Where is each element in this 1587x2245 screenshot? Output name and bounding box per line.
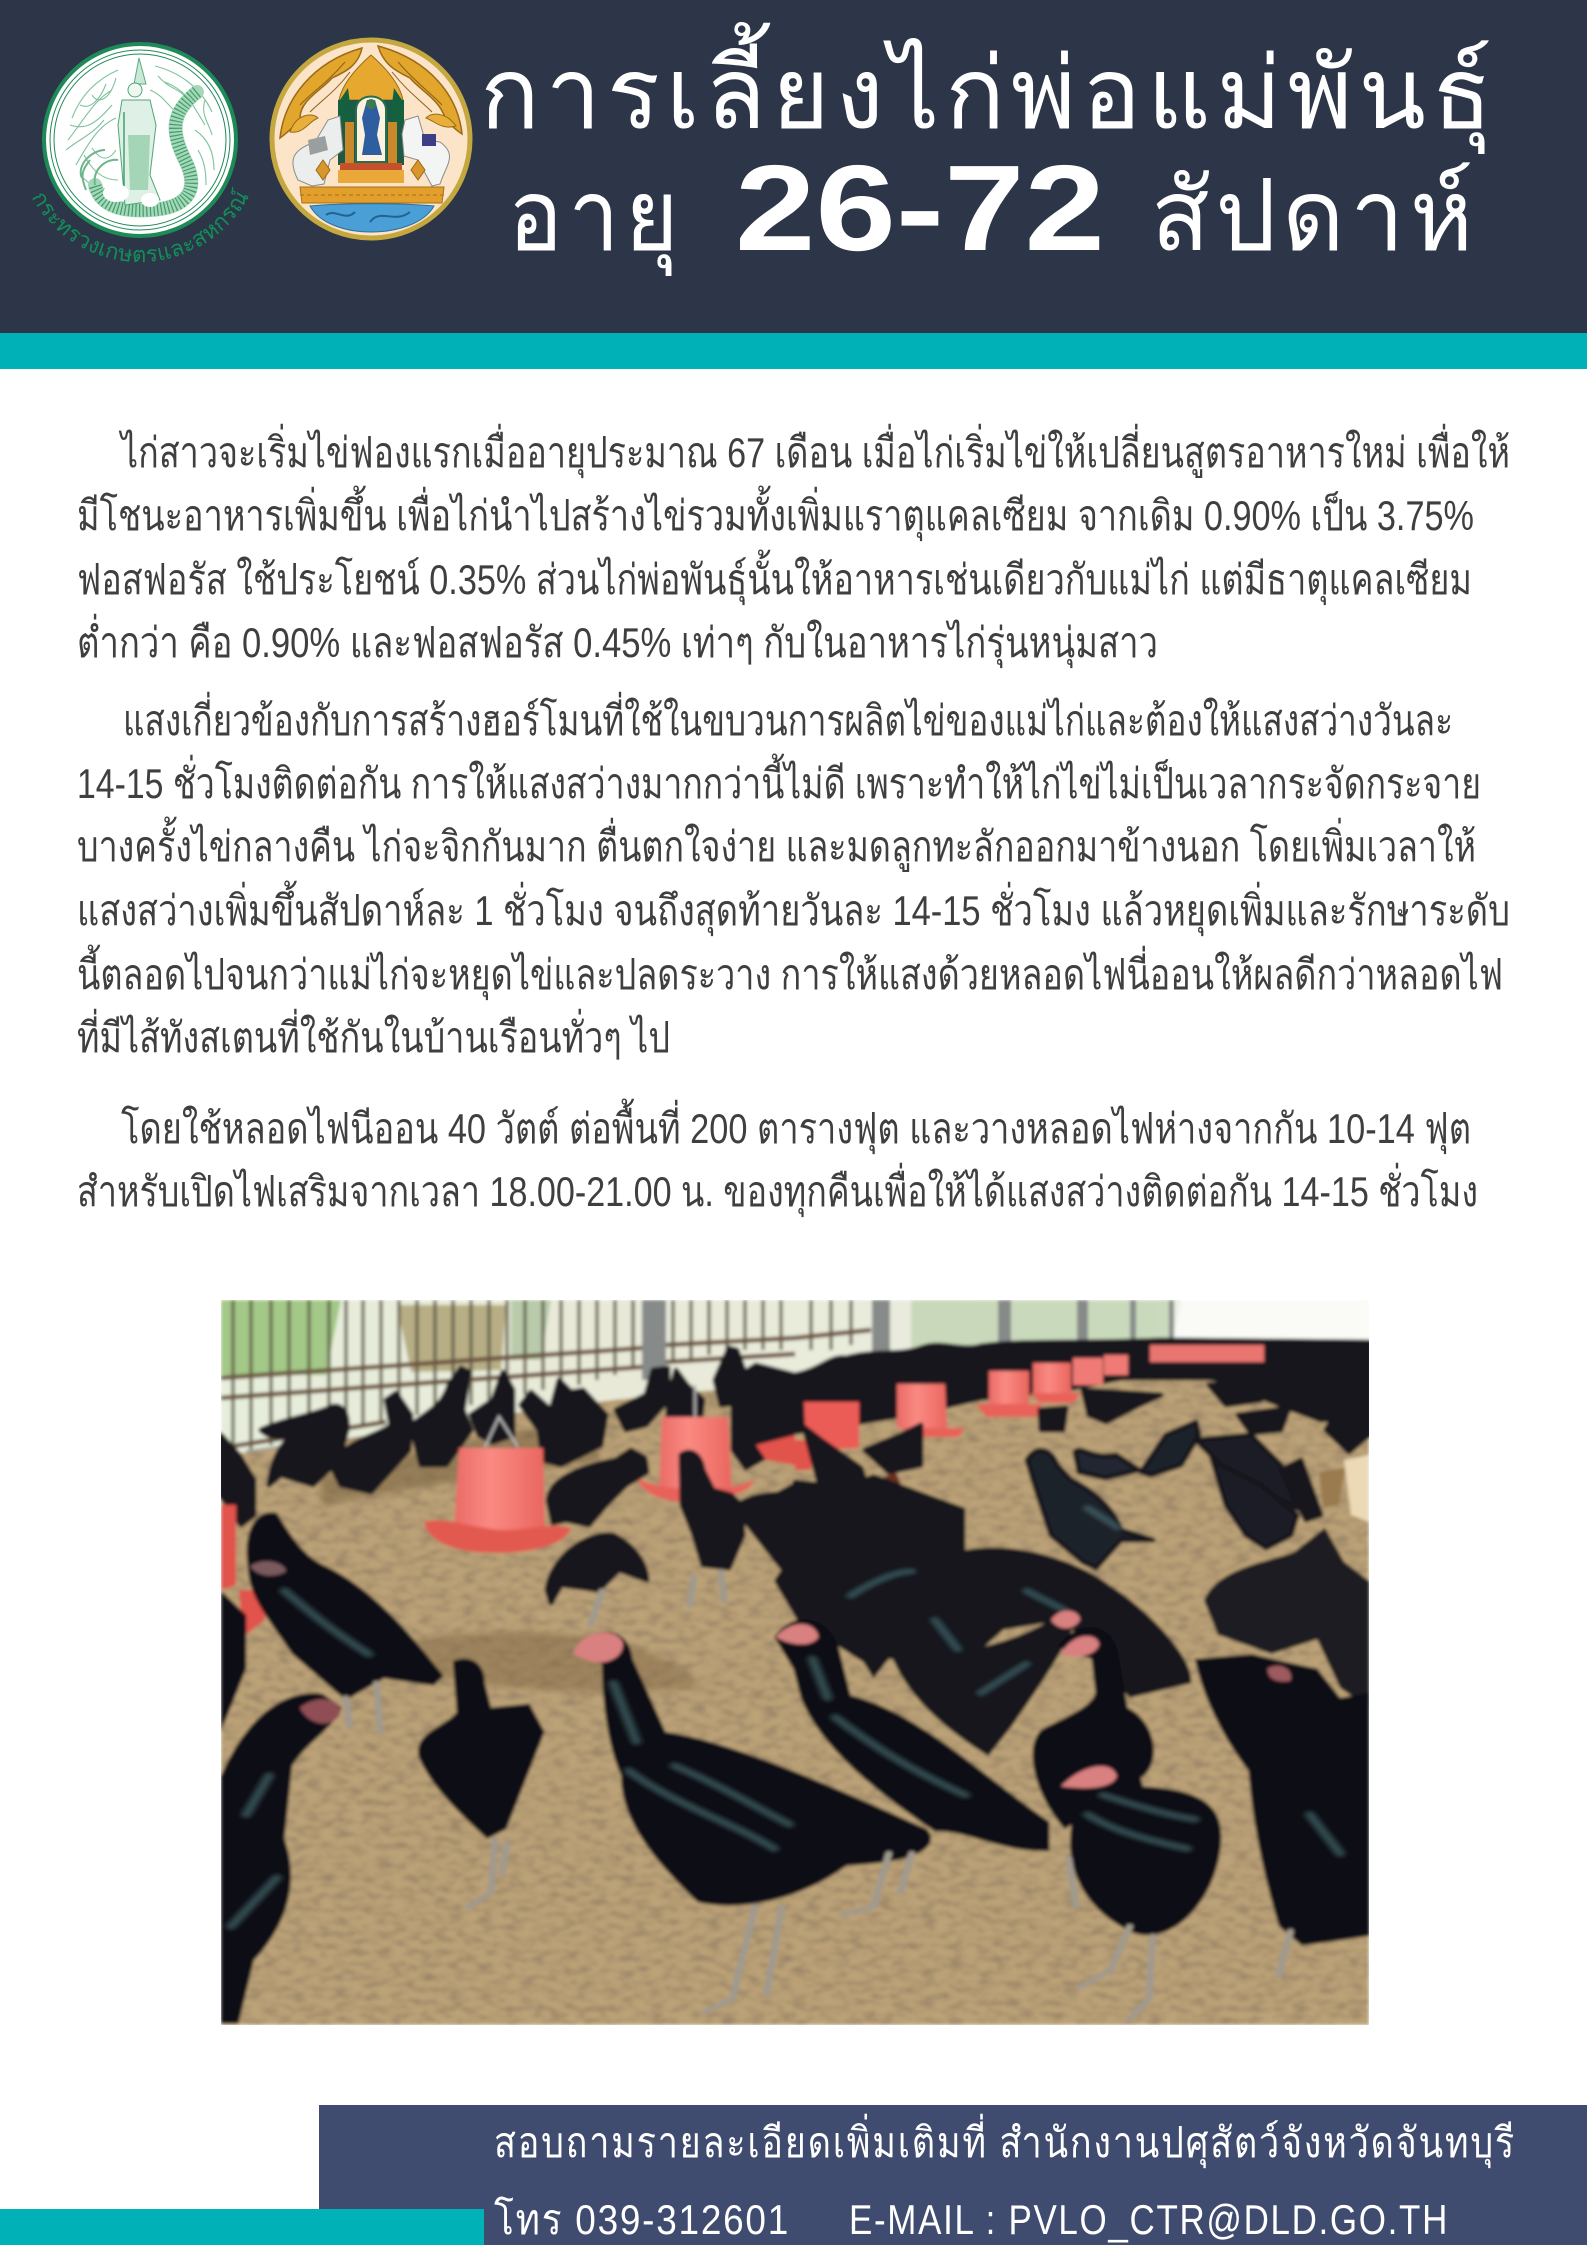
near cluster and foreground hens: [221, 1474, 1369, 2024]
teal footer stripe: [0, 2209, 484, 2245]
red feeders: [221, 1345, 1264, 1637]
footer line 2: phone: โทร 039-312601: [494, 2195, 790, 2243]
seal caption on arc: กระทรวงเกษตรและสหกรณ์: [32, 186, 248, 262]
photo: black hens in poultry house: [221, 1300, 1369, 2025]
footer line 2: email: E-MAIL : PVLO_CTR@DLD.GO.TH: [849, 2196, 1449, 2243]
title line 2: weeks range: 26-72: [735, 140, 1105, 276]
paragraph: lighting: [77, 692, 1510, 1061]
brown hen: [877, 1472, 911, 1538]
logo: ministry of agriculture seal: [32, 42, 248, 262]
footer contact text: [494, 2114, 1516, 2243]
title: [480, 22, 1498, 277]
paragraph: feed for laying hens: [77, 424, 1510, 669]
paragraph: lighting: ที่มีไส้ทังสเตนที่ใช้กันในบ้านเรือนทั่วๆ ไป: [77, 1009, 670, 1061]
mid-ground hens: [547, 1380, 1369, 1603]
litter floor: [221, 1350, 1369, 2025]
teal header stripe: [0, 333, 1587, 369]
back row hens left: [221, 1348, 795, 1525]
barn backdrop and fence: [221, 1300, 1369, 1490]
far background flock: [795, 1340, 1369, 1432]
straw post and box: [1344, 1455, 1369, 1522]
paragraph: lamp spec: [77, 1098, 1478, 1218]
title line 2: age: อายุ: [508, 160, 684, 277]
title line 2: weeks: สัปดาห์: [1151, 160, 1479, 272]
paragraph: feed for laying hens: ต่ำกว่า คือ 0.90% และฟอสฟอรัส 0.45% เท่าๆ กับในอาหารไก่รุ่นหนุ่มสาว: [77, 614, 1158, 669]
logo: livestock department seal: [272, 40, 470, 238]
title line 1: การเลี้ยงไก่พ่อแม่พันธุ์: [480, 22, 1498, 155]
header band: [0, 0, 1587, 333]
footer panel: [319, 2105, 1587, 2245]
